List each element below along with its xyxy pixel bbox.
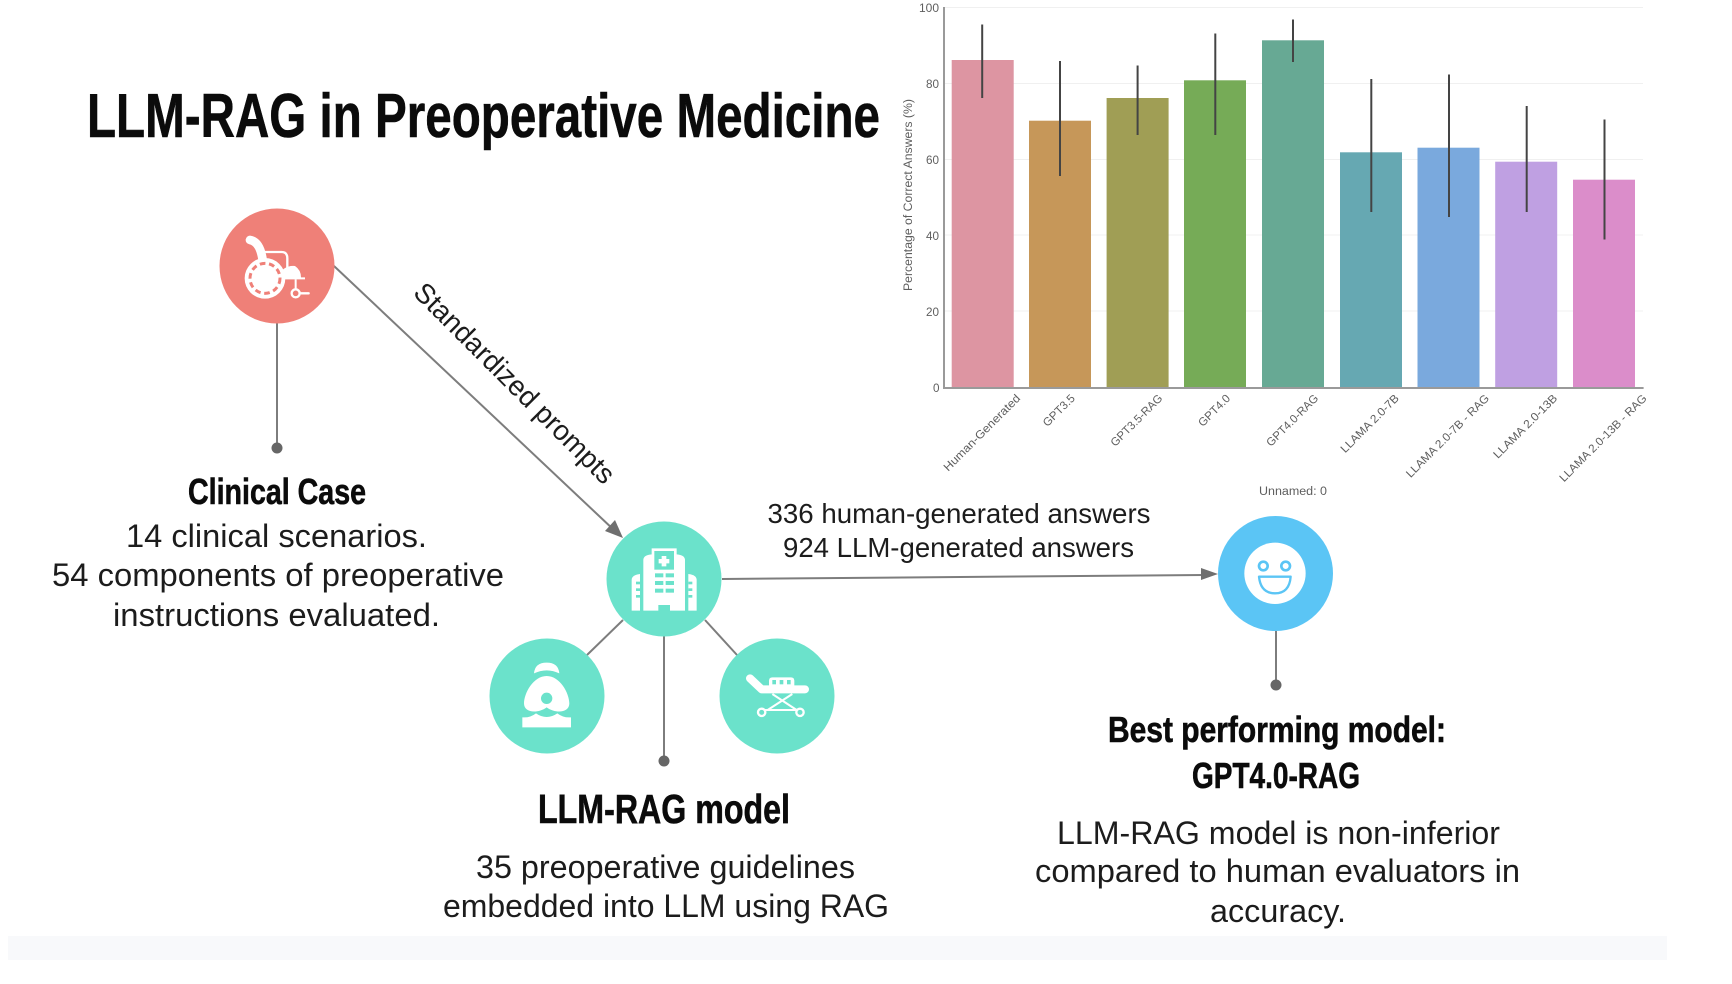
body: conclusion: compared to human evaluators in [1035, 853, 1520, 889]
body: conclusion [1035, 815, 1520, 929]
x axis title: Unnamed: 0 [1259, 486, 1327, 498]
label: standardized prompts: Standardized prompts [408, 276, 621, 490]
body: clinical case details: instructions evaluated. [113, 597, 440, 633]
connector: clinical case stem [272, 323, 282, 454]
icon: smiling face [1218, 516, 1333, 631]
text block: best performing model [1035, 709, 1520, 929]
icon: patient mask [490, 638, 604, 754]
body: LLM-RAG model details: 35 preoperative guidelines [476, 849, 855, 885]
label: answer counts [768, 498, 1150, 563]
text block: clinical case [52, 471, 504, 633]
x axis category labels: LLAMA 2.0-7B - RAG [1404, 393, 1492, 480]
connectors: hospital to sub-icons [587, 620, 737, 766]
heading: LLM-RAG model: LLM-RAG model [538, 786, 790, 832]
x axis category labels: GPT3.5 [1041, 393, 1078, 429]
body: conclusion: accuracy. [1210, 893, 1346, 929]
icon: wheelchair [220, 208, 334, 324]
y axis tick labels: 100 [919, 3, 939, 15]
arrow: clinical case to LLM-RAG [334, 266, 623, 538]
body: clinical case details: 54 components of preoperative [52, 557, 504, 593]
x axis category labels: GPT4.0 [1196, 393, 1233, 429]
icon: hospital [606, 522, 722, 636]
y axis tick labels: 0 [933, 383, 940, 395]
y axis tick labels [919, 3, 940, 395]
y axis tick labels: 60 [926, 155, 939, 167]
heading: clinical case: Clinical Case [188, 471, 366, 512]
heading: best performing model [1108, 709, 1446, 796]
x axis category labels: Human-Generated [942, 393, 1023, 474]
x axis category labels [942, 392, 1650, 485]
bar chart: percentage of correct answers [903, 3, 1650, 498]
y axis title: Percentage of Correct Answers (%) [903, 99, 915, 291]
body: LLM-RAG model details: embedded into LLM using RAG [443, 888, 889, 924]
x axis category labels: LLAMA 2.0-13B [1492, 392, 1560, 461]
heading: best performing model: GPT4.0-RAG [1192, 755, 1360, 796]
heading: best performing model: Best performing model: [1108, 709, 1446, 750]
y axis tick labels: 80 [926, 79, 939, 91]
body: clinical case details [52, 518, 504, 633]
bars [952, 40, 1635, 388]
label: answer counts: 336 human-generated answers [768, 498, 1150, 529]
error bars [982, 20, 1604, 240]
x axis category labels: GPT3.5-RAG [1109, 393, 1165, 449]
body: LLM-RAG model details [443, 849, 889, 924]
x axis category labels: LLAMA 2.0-13B - RAG [1558, 393, 1650, 485]
title: LLM-RAG in Preoperative Medicine [87, 82, 880, 151]
arrow: LLM-RAG to best model [722, 568, 1218, 580]
x axis category labels: LLAMA 2.0-7B [1339, 392, 1402, 456]
label: answer counts: 924 LLM-generated answers [783, 532, 1134, 563]
connector: best model stem [1270, 631, 1282, 690]
y axis tick labels: 40 [926, 231, 939, 243]
bottom band [8, 936, 1667, 960]
icon: stretcher [720, 638, 834, 754]
y axis tick labels: 20 [926, 307, 939, 319]
x axis category labels: GPT4.0-RAG [1265, 393, 1321, 449]
axes [944, 7, 1644, 388]
body: clinical case details: 14 clinical scenarios. [126, 518, 427, 554]
text block: LLM-RAG model [443, 786, 889, 924]
grid lines [945, 8, 1643, 311]
body: conclusion: LLM-RAG model is non-inferior [1057, 815, 1500, 851]
